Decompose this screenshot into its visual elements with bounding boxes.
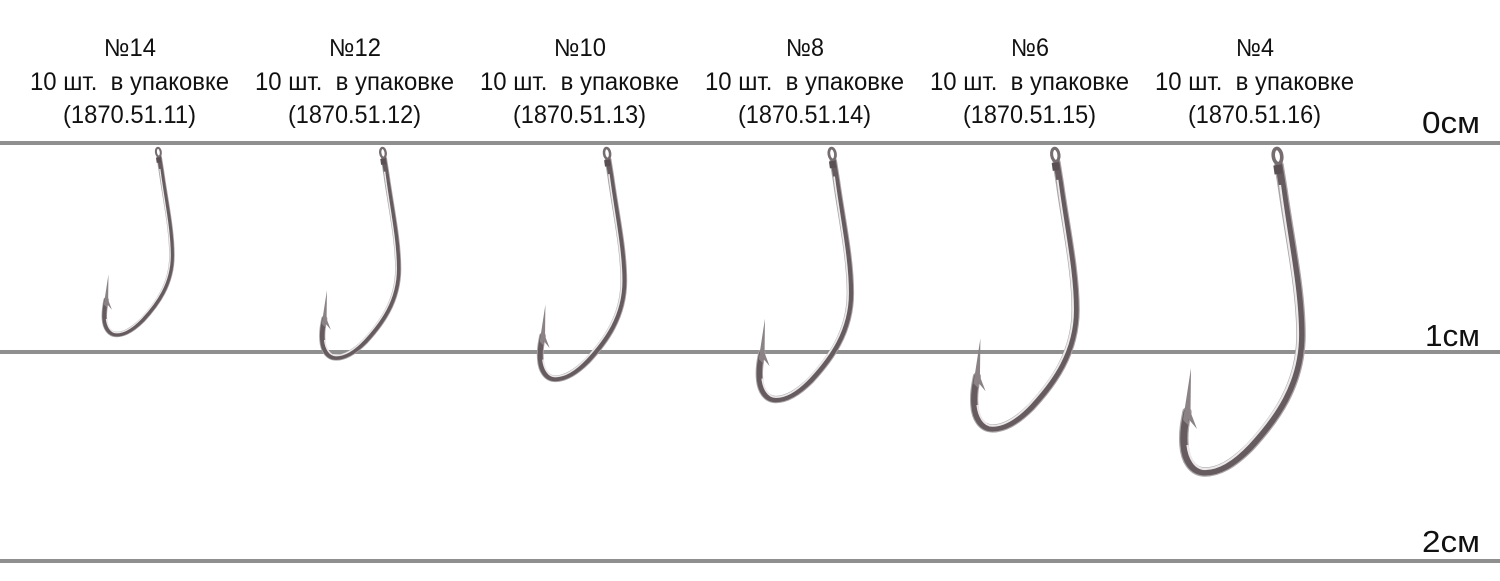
caption: hook No. 14: №14 xyxy=(104,35,156,62)
label: 1 cm: 1см xyxy=(1425,318,1480,353)
icon: hook No. 8 xyxy=(759,148,850,400)
caption: hook No. 6: 10 шт. в упаковке xyxy=(930,69,1129,96)
caption: hook No. 8: 10 шт. в упаковке xyxy=(705,69,904,96)
label: 2 cm: 2см xyxy=(1422,524,1480,559)
caption: hook No. 10: 10 шт. в упаковке xyxy=(480,69,679,96)
ruler line: 2 cm xyxy=(0,559,1500,563)
caption: hook No. 6 xyxy=(930,35,1129,129)
caption: hook No. 14 xyxy=(30,35,229,129)
ruler line: 0 cm xyxy=(0,141,1500,145)
caption: hook No. 4: 10 шт. в упаковке xyxy=(1155,69,1354,96)
icon: hook No. 14 xyxy=(104,148,172,335)
icon: hook No. 10 xyxy=(540,148,624,379)
icon: hook No. 4 xyxy=(1183,148,1301,472)
caption: hook No. 10: (1870.51.13) xyxy=(513,102,646,129)
caption: hook No. 14: (1870.51.11) xyxy=(63,102,196,129)
caption: hook No. 14: 10 шт. в упаковке xyxy=(30,69,229,96)
label: 0 cm: 0см xyxy=(1422,105,1480,140)
caption: hook No. 12: (1870.51.12) xyxy=(288,102,421,129)
caption: hook No. 10: №10 xyxy=(554,35,606,62)
caption: hook No. 4 xyxy=(1155,35,1354,129)
caption: hook No. 6: (1870.51.15) xyxy=(963,102,1096,129)
caption: hook No. 10 xyxy=(480,35,679,129)
caption: hook No. 8 xyxy=(705,35,904,129)
caption: hook No. 4: №4 xyxy=(1236,35,1274,62)
caption: hook No. 8: (1870.51.14) xyxy=(738,102,871,129)
caption: hook No. 12 xyxy=(255,35,454,129)
icon: hook No. 6 xyxy=(973,148,1076,428)
caption: hook No. 6: №6 xyxy=(1011,35,1049,62)
caption: hook No. 8: №8 xyxy=(786,35,824,62)
caption: hook No. 12: 10 шт. в упаковке xyxy=(255,69,454,96)
caption: hook No. 4: (1870.51.16) xyxy=(1188,102,1321,129)
ruler line: 1 cm xyxy=(0,350,1500,354)
caption: hook No. 12: №12 xyxy=(329,35,381,62)
icon: hook No. 12 xyxy=(322,148,398,358)
